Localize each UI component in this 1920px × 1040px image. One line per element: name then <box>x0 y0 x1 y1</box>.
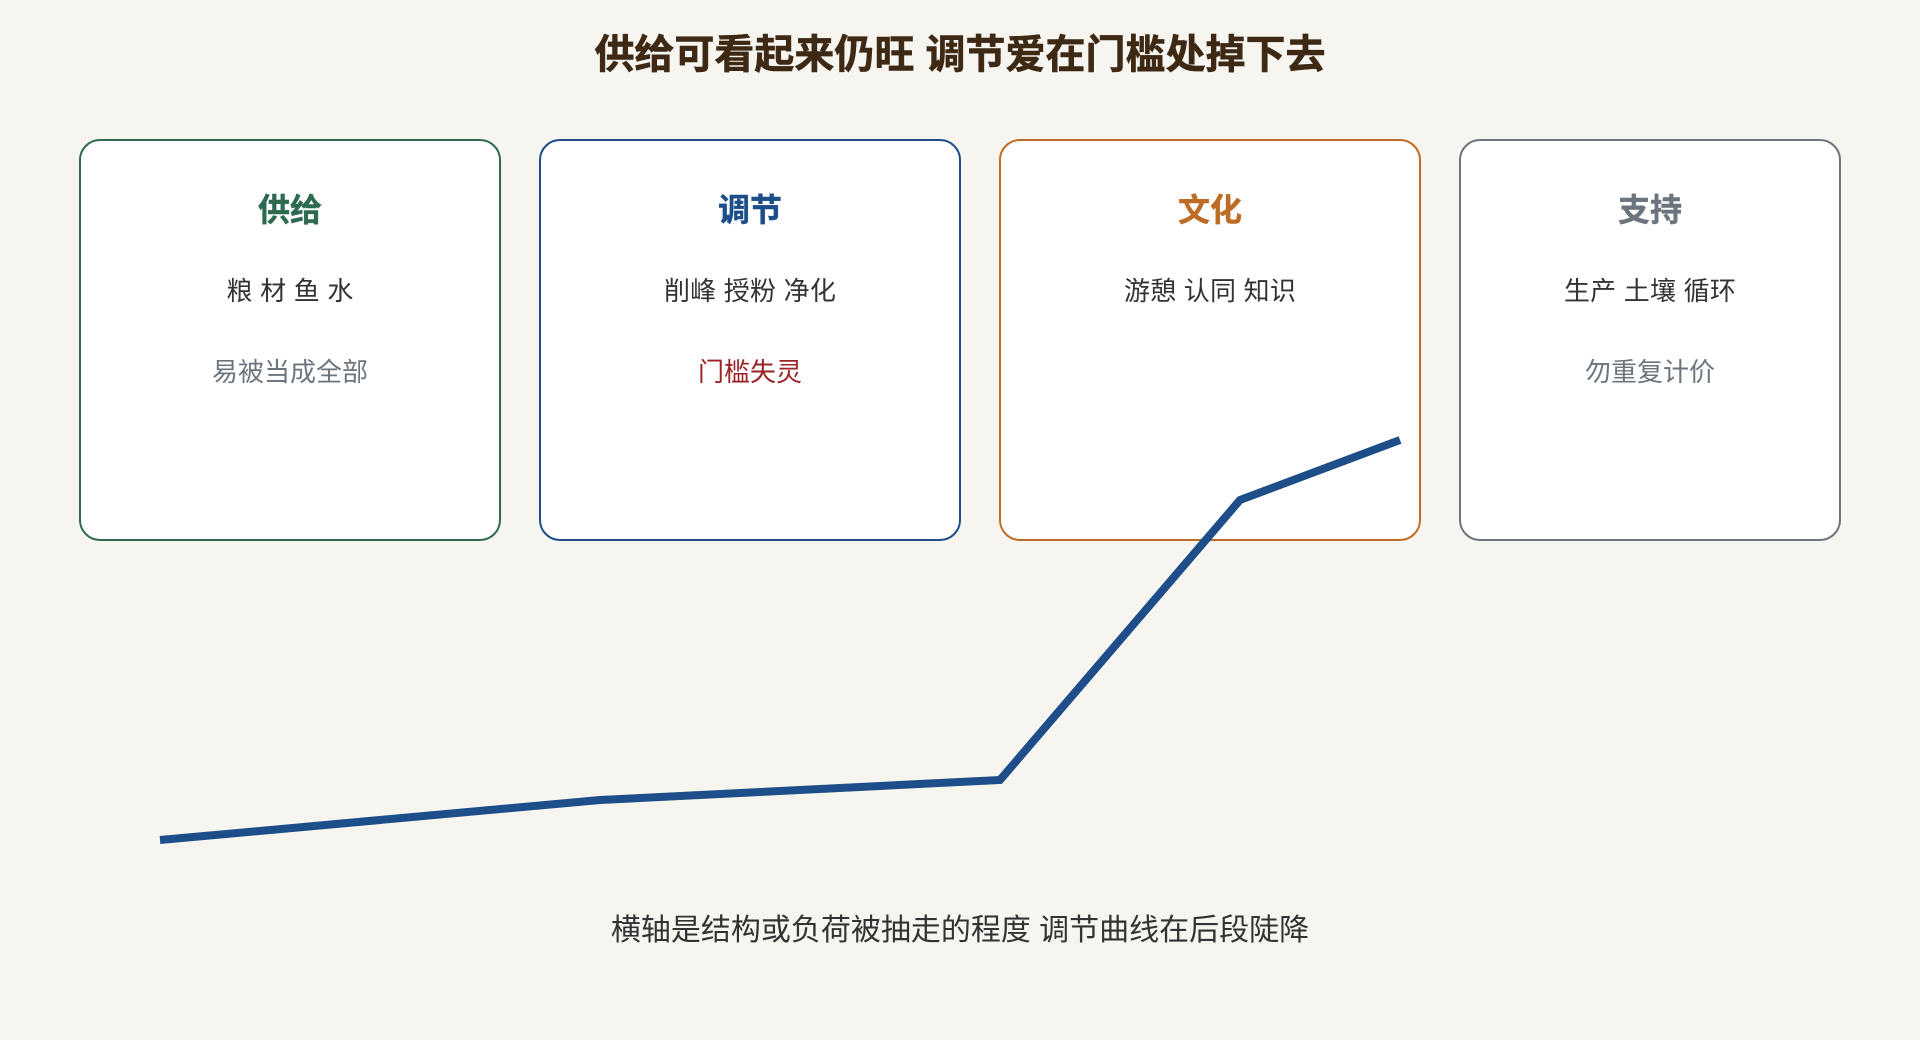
heading: regulation: 调节 <box>718 192 782 228</box>
items: support: 生产 土壤 循环 <box>1564 276 1736 306</box>
heading: supply: 供给 <box>258 192 322 228</box>
items: culture: 游憩 认同 知识 <box>1124 276 1296 306</box>
heading: culture: 文化 <box>1178 192 1242 228</box>
panel: support <box>1459 139 1841 541</box>
title: 供给可看起来仍旺 调节爱在门槛处掉下去 <box>594 33 1326 77</box>
heading: support: 支持 <box>1618 192 1682 228</box>
panel: supply <box>79 139 501 541</box>
items: supply: 粮 材 鱼 水 <box>226 276 354 306</box>
note: support: 勿重复计价 <box>1585 357 1715 387</box>
panel: culture <box>999 139 1421 541</box>
note: supply: 易被当成全部 <box>212 357 368 387</box>
items: regulation: 削峰 授粉 净化 <box>664 276 836 306</box>
caption: 横轴是结构或负荷被抽走的程度 调节曲线在后段陡降 <box>611 914 1309 947</box>
panel: regulation <box>539 139 961 541</box>
note: regulation: 门槛失灵 <box>698 357 802 387</box>
